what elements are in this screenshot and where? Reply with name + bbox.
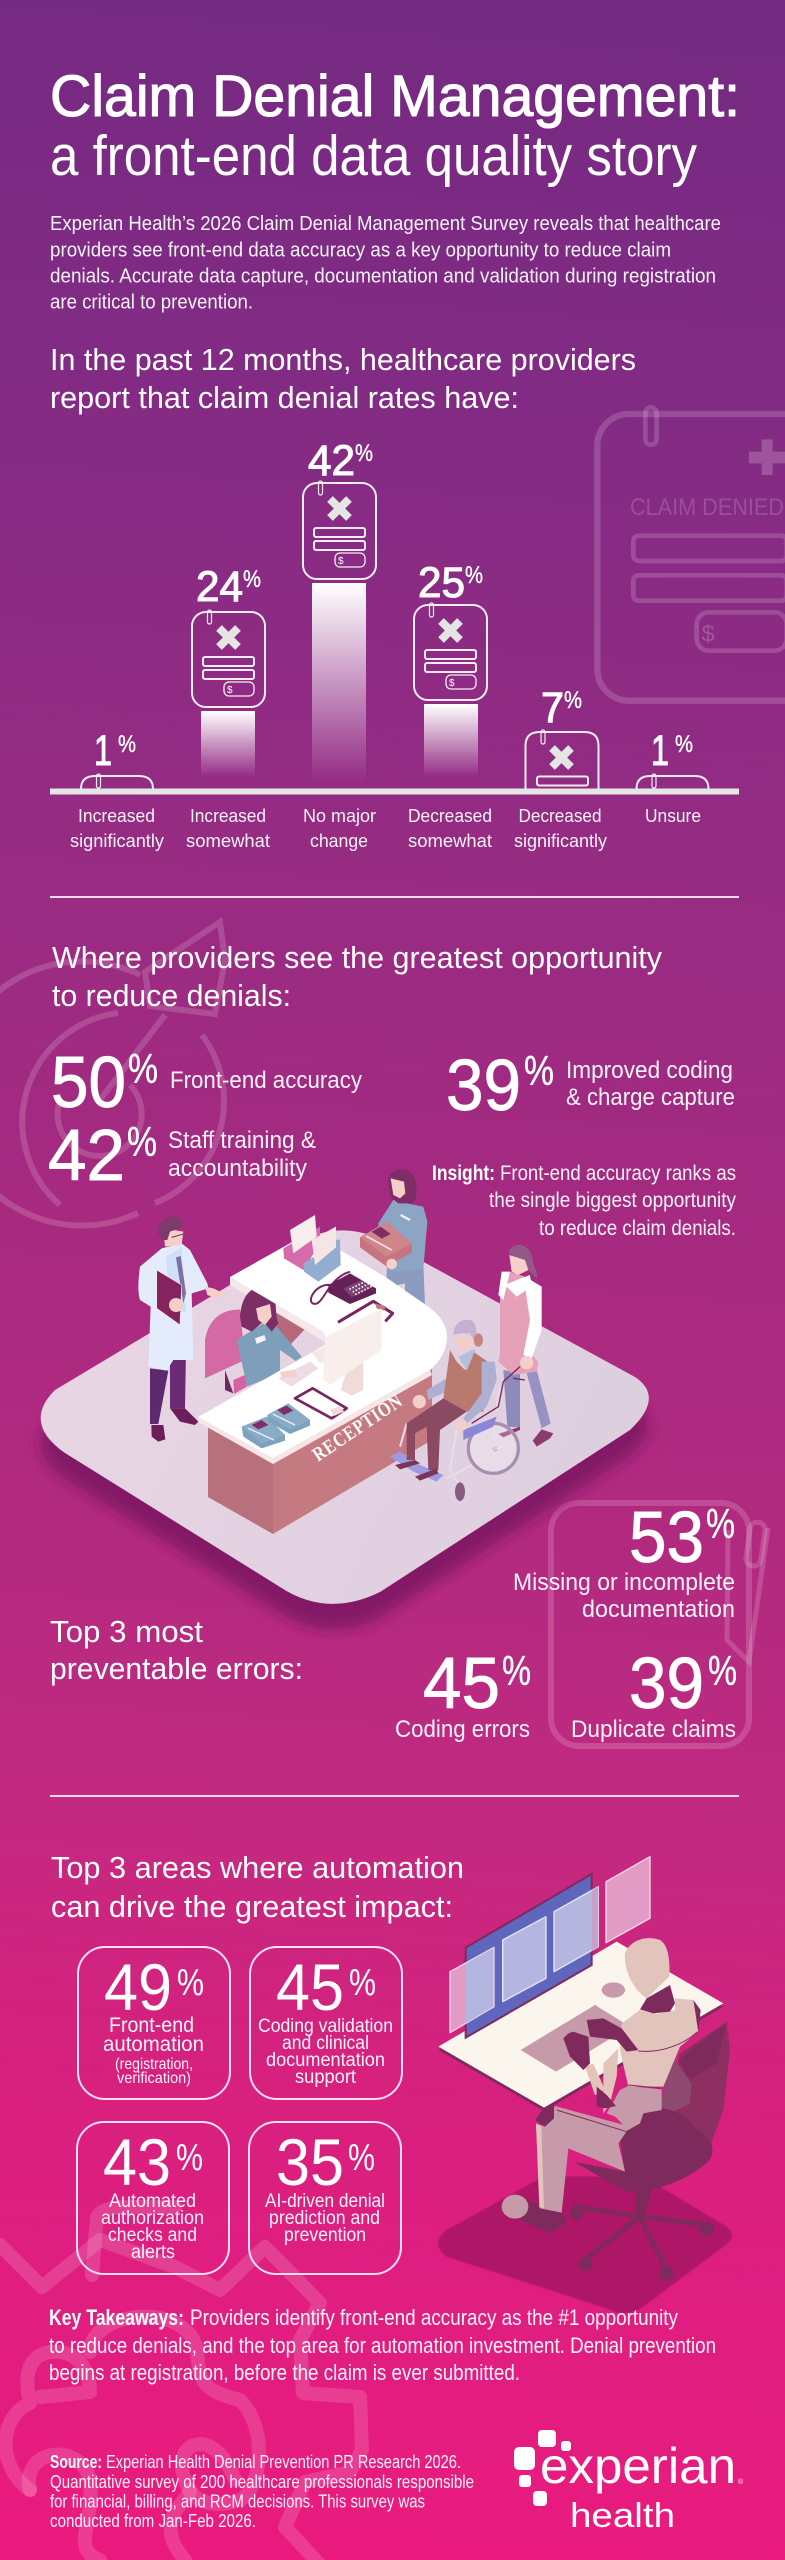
watermark: clipboard and pencil bbox=[551, 1503, 768, 1746]
intro text: providers see front-end data accuracy as a key opportunity to reduce claim bbox=[50, 240, 671, 262]
insight callout: the single biggest opportunity bbox=[489, 1189, 736, 1212]
chart values: 25 bbox=[418, 559, 465, 607]
stat: 39% duplicate claims bbox=[571, 1644, 737, 1743]
watermark: target with dart bbox=[0, 922, 225, 1226]
card: 45% coding validation: support bbox=[295, 2067, 357, 2088]
stat: 53% missing documentation: % bbox=[706, 1500, 735, 1547]
watermark: claim denied form: $ bbox=[702, 620, 715, 646]
bar: decreased somewhat: $ bbox=[449, 678, 455, 689]
card: 43% automated authorization: alerts bbox=[131, 2242, 175, 2263]
watermark: claim denied form bbox=[597, 407, 785, 701]
chart values: 7 bbox=[541, 684, 564, 732]
stat: 42% staff training: % bbox=[127, 1118, 157, 1165]
chart category labels: somewhat bbox=[186, 831, 270, 851]
stat: 45% coding errors: 45 bbox=[423, 1644, 500, 1724]
bar: increased somewhat bbox=[192, 610, 265, 777]
platform shadow bbox=[41, 1256, 649, 1630]
doctor bbox=[138, 1217, 225, 1442]
platform bbox=[41, 1230, 649, 1604]
heading: greatest opportunity: to reduce denials: bbox=[52, 978, 291, 1013]
illustration: hospital reception bbox=[41, 1169, 649, 1630]
heading: preventable errors bbox=[50, 1614, 303, 1686]
heading: preventable errors: preventable errors: bbox=[50, 1651, 303, 1686]
desk sign: RECEPTION bbox=[308, 1390, 407, 1466]
chair and lower body bbox=[502, 2022, 730, 2281]
card: 49% front-end automation: automation bbox=[103, 2033, 204, 2056]
chart category labels: somewhat bbox=[408, 831, 492, 851]
heading: denial rates: report that claim denial rates have: bbox=[50, 380, 519, 415]
insight callout: to reduce claim denials. bbox=[539, 1217, 736, 1240]
source note: for financial, billing, and RCM decisions. This survey was bbox=[50, 2492, 425, 2512]
heading: denial rates bbox=[50, 342, 636, 415]
heading: greatest opportunity: Where providers see the greatest opportunity bbox=[52, 940, 662, 975]
intro text: Experian Health’s 2026 Claim Denial Management Survey reveals that healthcare bbox=[50, 213, 721, 235]
stat: 53% missing documentation bbox=[513, 1498, 735, 1623]
key takeaways: Providers identify front-end accuracy as the #1 opportunity bbox=[190, 2305, 678, 2330]
stat: 50% front-end accuracy bbox=[51, 1043, 362, 1123]
heading: greatest opportunity bbox=[52, 940, 662, 1013]
card: 45% coding validation bbox=[250, 1947, 402, 2099]
stat: 53% missing documentation: Missing or incomplete bbox=[513, 1569, 735, 1596]
woman pushing wheelchair bbox=[498, 1245, 553, 1447]
stat: 39% improved coding: Improved coding bbox=[566, 1057, 733, 1084]
stat: 50% front-end accuracy: 50 bbox=[51, 1043, 126, 1123]
intro text: denials. Accurate data capture, documentation and validation during registration bbox=[50, 266, 716, 288]
elder in wheelchair bbox=[390, 1320, 525, 1501]
stat: 45% coding errors: Coding errors bbox=[395, 1716, 530, 1743]
chart values: % bbox=[243, 566, 261, 593]
card: 43% automated authorization: % bbox=[176, 2137, 203, 2179]
chart category labels bbox=[70, 806, 701, 851]
chart values bbox=[94, 437, 693, 775]
desk and screens bbox=[438, 1857, 723, 2111]
chart values: 42 bbox=[308, 437, 355, 485]
reception desk top bbox=[198, 1232, 447, 1458]
chart values: % bbox=[118, 731, 136, 758]
key takeaways: Key Takeaways: bbox=[49, 2305, 184, 2330]
card: 35% AI-driven denial prediction: prediction and bbox=[269, 2208, 380, 2229]
card: 43% automated authorization: checks and bbox=[108, 2225, 197, 2246]
card: 45% coding validation: % bbox=[349, 1962, 376, 2004]
heading: automation: Top 3 areas where automation bbox=[51, 1850, 464, 1885]
bar: no major change bbox=[303, 481, 376, 783]
chart category labels: change bbox=[310, 831, 368, 851]
card: 35% AI-driven denial prediction: 35 bbox=[276, 2125, 344, 2199]
stat: 39% improved coding: & charge capture bbox=[566, 1084, 735, 1111]
stat: 39% duplicate claims: % bbox=[708, 1647, 737, 1694]
stat: 39% duplicate claims: 39 bbox=[629, 1644, 704, 1724]
stat: 50% front-end accuracy: % bbox=[128, 1045, 158, 1092]
source note bbox=[50, 2452, 474, 2531]
watermark: puzzle and circuit bbox=[0, 2207, 362, 2560]
stat: 53% missing documentation: 53 bbox=[629, 1498, 704, 1578]
illustration: robot at desk bbox=[438, 1857, 732, 2313]
receptionist bbox=[205, 1288, 305, 1394]
source note: Source: bbox=[50, 2452, 102, 2472]
chart values: % bbox=[355, 440, 373, 467]
stat: 39% duplicate claims: Duplicate claims bbox=[571, 1716, 736, 1743]
logo: experian health: experian bbox=[540, 2438, 736, 2494]
heading: automation bbox=[51, 1850, 464, 1924]
stat: 39% improved coding: % bbox=[524, 1047, 554, 1094]
card: 43% automated authorization bbox=[77, 2122, 229, 2274]
bar: increased significantly bbox=[81, 774, 153, 789]
card: 45% coding validation: documentation bbox=[266, 2050, 385, 2071]
source note: conducted from Jan-Feb 2026. bbox=[50, 2511, 256, 2531]
nurse with books bbox=[360, 1169, 427, 1304]
floor shadow bbox=[438, 2177, 732, 2313]
key takeaways bbox=[49, 2305, 716, 2385]
heading: preventable errors: Top 3 most bbox=[50, 1614, 203, 1649]
card: 49% front-end automation: % bbox=[177, 1962, 204, 2004]
card: 43% automated authorization: 43 bbox=[103, 2125, 171, 2199]
chart values: 1 bbox=[651, 727, 669, 775]
chart category labels: Increased bbox=[190, 806, 266, 826]
reception desk base bbox=[208, 1277, 432, 1534]
key takeaways: begins at registration, before the claim is ever submitted. bbox=[49, 2360, 520, 2385]
chart category labels: Decreased bbox=[408, 806, 492, 826]
heading: automation: can drive the greatest impact: bbox=[51, 1889, 453, 1924]
stat: 53% missing documentation: documentation bbox=[582, 1596, 735, 1623]
card: 45% coding validation: and clinical bbox=[282, 2033, 369, 2054]
card: 49% front-end automation: Front-end bbox=[109, 2014, 194, 2037]
card: 49% front-end automation: verification) bbox=[117, 2070, 191, 2087]
card: 45% coding validation: Coding validation bbox=[258, 2016, 393, 2037]
insight callout: Front-end accuracy ranks as bbox=[500, 1162, 736, 1185]
robot upper body bbox=[563, 1938, 701, 2130]
intro text: are critical to prevention. bbox=[50, 292, 253, 314]
bar: decreased somewhat bbox=[414, 603, 487, 777]
chart category labels: significantly bbox=[514, 831, 607, 851]
logo: experian health: ® bbox=[738, 2478, 744, 2486]
heading: denial rates: In the past 12 months, healthcare providers bbox=[50, 342, 636, 377]
logo: experian health: health bbox=[570, 2497, 675, 2535]
card: 35% AI-driven denial prediction: % bbox=[348, 2137, 375, 2179]
stat: 42% staff training bbox=[48, 1116, 316, 1196]
stat: 42% staff training: Staff training & bbox=[168, 1127, 316, 1154]
card: 49% front-end automation bbox=[78, 1947, 230, 2099]
chart category labels: Decreased bbox=[518, 806, 602, 826]
intro text bbox=[50, 213, 721, 314]
chart values: % bbox=[465, 562, 483, 589]
source note: Experian Health Denial Prevention PR Research 2026. bbox=[106, 2452, 461, 2472]
insight callout: Insight: bbox=[432, 1162, 495, 1185]
card: 49% front-end automation: (registration, bbox=[115, 2056, 193, 2073]
bar: unsure bbox=[636, 774, 708, 789]
chart category labels: significantly bbox=[70, 831, 164, 851]
chart values: 1 bbox=[94, 727, 112, 775]
stat: 50% front-end accuracy: Front-end accuracy bbox=[170, 1067, 362, 1094]
chart category labels: No major bbox=[303, 806, 376, 826]
source note: Quantitative survey of 200 healthcare professionals responsible bbox=[50, 2472, 474, 2492]
stat: 45% coding errors bbox=[395, 1644, 531, 1743]
card: 35% AI-driven denial prediction: AI-driven denial bbox=[265, 2191, 385, 2212]
chart values: % bbox=[675, 731, 693, 758]
insight callout bbox=[432, 1162, 736, 1240]
chart values: % bbox=[564, 687, 582, 714]
card: 43% automated authorization: authorization bbox=[101, 2208, 204, 2229]
bar: no major change: $ bbox=[338, 556, 344, 567]
chart category labels: Increased bbox=[78, 806, 155, 826]
stat: 42% staff training: accountability bbox=[168, 1155, 307, 1182]
card: 43% automated authorization: Automated bbox=[109, 2191, 196, 2212]
chart values: 24 bbox=[196, 563, 243, 611]
stat: 39% improved coding bbox=[446, 1046, 735, 1126]
card: 49% front-end automation: 49 bbox=[104, 1950, 172, 2024]
logo: experian health bbox=[514, 2430, 744, 2535]
desk items bbox=[242, 1215, 393, 1448]
bar: increased somewhat: $ bbox=[227, 685, 233, 696]
card: 45% coding validation: 45 bbox=[276, 1950, 344, 2024]
stat: 42% staff training: 42 bbox=[48, 1116, 125, 1196]
title: Claim Denial Management: bbox=[50, 64, 740, 129]
chart axis bbox=[50, 788, 739, 794]
card: 35% AI-driven denial prediction: prevention bbox=[284, 2225, 366, 2246]
title: a front-end data quality story bbox=[50, 124, 697, 188]
chart category labels: Unsure bbox=[645, 806, 701, 826]
bar chart: denial rate change bbox=[50, 437, 739, 851]
bar: decreased significantly bbox=[526, 730, 598, 789]
title bbox=[50, 64, 740, 188]
stat: 39% improved coding: 39 bbox=[446, 1046, 521, 1126]
stat: 45% coding errors: % bbox=[502, 1647, 531, 1694]
card: 35% AI-driven denial prediction bbox=[249, 2122, 401, 2274]
